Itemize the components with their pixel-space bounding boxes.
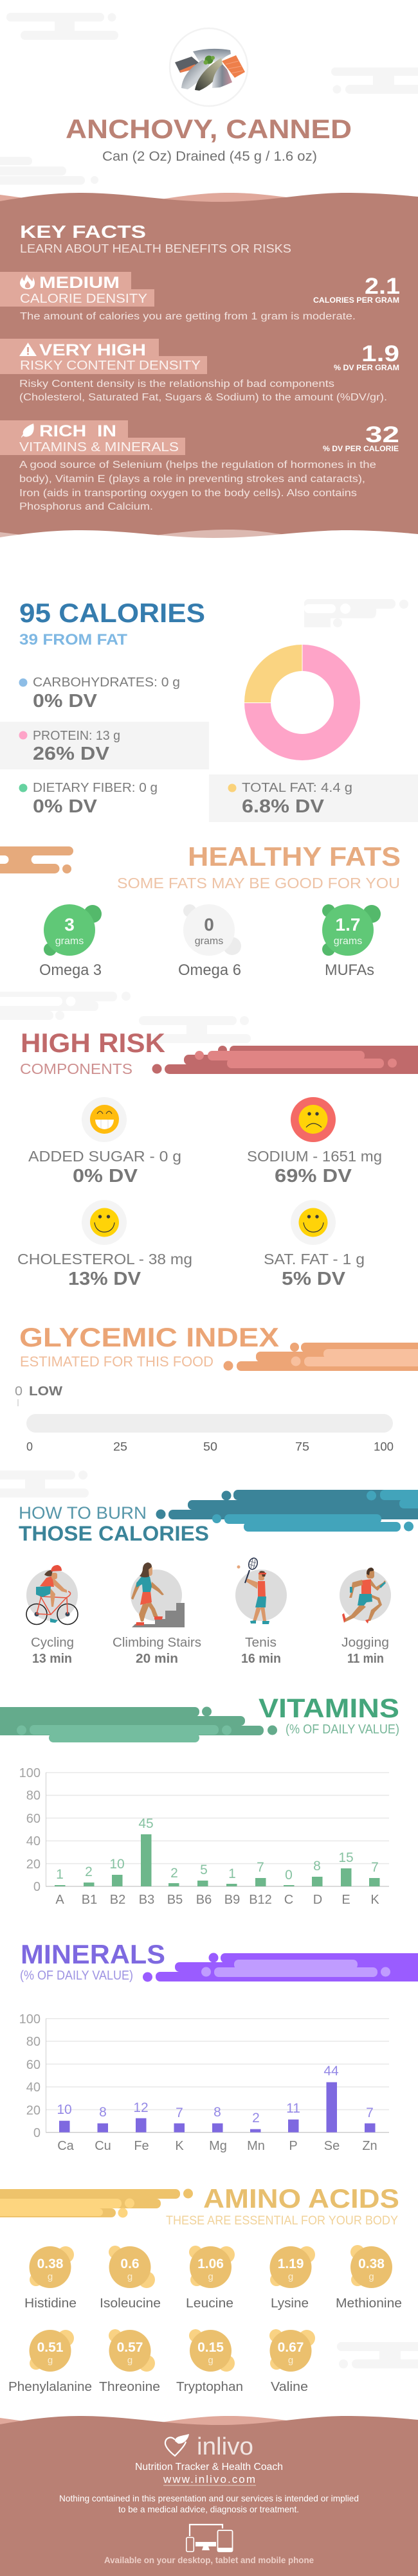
bar chart: minerals: 12 [133, 2100, 149, 2115]
badge: tryptophan: g [208, 2355, 214, 2366]
bar chart: vitamins: B9 [224, 1893, 240, 1907]
bar chart: vitamins: 40 [26, 1834, 41, 1848]
bar chart: minerals: 0 [33, 2126, 41, 2140]
heading: glycemic index: GLYCEMIC INDEX [19, 1322, 279, 1352]
subheading: ESTIMATED FOR THIS FOOD [20, 1354, 214, 1370]
bar chart: minerals: Mn [247, 2139, 265, 2153]
activity: jogging [340, 1568, 391, 1666]
item: total fat [209, 774, 418, 822]
badge: valine: g [288, 2355, 293, 2366]
fact: rich in vitamins and minerals: % DV PER CALORIE [323, 445, 399, 453]
bar chart: minerals: 40 [26, 2080, 41, 2095]
icon: sad face [298, 1105, 328, 1134]
activity: tennis [235, 1557, 287, 1666]
item: carbohydrates: CARBOHYDRATES: 0 g [33, 675, 180, 690]
chart: glycemic scale: 0 [26, 1440, 33, 1453]
marker: value and level [15, 1384, 62, 1406]
fact: rich in vitamins and minerals [0, 420, 399, 512]
item: protein [0, 722, 209, 769]
marker: value and level: 0 [15, 1384, 23, 1399]
heading: vitamins: VITAMINS [259, 1693, 399, 1723]
bar chart: vitamins: C [284, 1893, 293, 1907]
decorative ribbon [0, 1707, 277, 1742]
badge: histidine: Histidine [24, 2296, 77, 2311]
bar chart: vitamins: 5 [200, 1863, 208, 1877]
bar chart: vitamins: E [341, 1893, 350, 1907]
icon: runner [340, 1568, 391, 1623]
badge: histidine: 0.38 [37, 2257, 64, 2271]
item: carbohydrates [19, 675, 180, 711]
activity: climbing stairs: Climbing Stairs [113, 1636, 201, 1650]
badge: threonine: g [127, 2355, 132, 2366]
badge: MUFAs: MUFAs [325, 962, 374, 979]
fact: risky content density: (Cholesterol, Saturated Fat, Sugars & Sodium) to the amount (%DV/gr). [19, 392, 387, 403]
badge: isoleucine: g [127, 2271, 132, 2282]
heading line 1: HOW TO BURN [19, 1503, 147, 1523]
bar chart: minerals: Se [324, 2139, 340, 2153]
icon: leaf [21, 424, 34, 438]
bar chart: vitamins: B5 [167, 1893, 183, 1907]
panel: calories [0, 598, 418, 822]
icon: smiling face [298, 1208, 328, 1237]
badge: lysine: 1.19 [278, 2257, 304, 2271]
badge: omega 3 [39, 904, 102, 979]
panel: high risk [0, 992, 418, 1289]
badge: tryptophan: Tryptophan [176, 2380, 243, 2394]
item: saturated fat: SAT. FAT - 1 g [264, 1251, 365, 1267]
panel: key facts [0, 193, 418, 554]
badge: isoleucine: 0.6 [120, 2257, 140, 2271]
bar chart: vitamins: K [370, 1893, 379, 1907]
badge: omega 3: Omega 3 [39, 962, 102, 979]
item: saturated fat [264, 1200, 365, 1289]
chart: glycemic scale: 100 [374, 1440, 394, 1453]
panel: minerals [19, 1939, 418, 2153]
title: ANCHOVY, CANNED [66, 114, 352, 144]
bar chart: minerals: 8 [214, 2105, 221, 2120]
bar chart: minerals: 2 [252, 2111, 260, 2125]
badge: tryptophan: 0.15 [197, 2340, 224, 2355]
bar chart: vitamins: B6 [196, 1893, 212, 1907]
badge: MUFAs: 1.7 [336, 915, 360, 935]
bar chart: vitamins: 8 [313, 1859, 321, 1874]
activity: jogging: Jogging [341, 1636, 389, 1650]
bar chart: minerals: Zn [362, 2139, 377, 2153]
bar chart: vitamins: B3 [139, 1893, 154, 1907]
fact: calorie density: MEDIUM [39, 274, 120, 292]
bar chart: vitamins: 7 [257, 1860, 264, 1875]
subheading: LEARN ABOUT HEALTH BENEFITS OR RISKS [20, 242, 291, 255]
fact: risky content density: RISKY CONTENT DENSITY [20, 359, 201, 373]
badge: lysine: Lysine [271, 2296, 309, 2311]
fact: calorie density: CALORIE DENSITY [20, 292, 147, 306]
subheading: SOME FATS MAY BE GOOD FOR YOU [117, 875, 400, 891]
badge: leucine [186, 2246, 235, 2311]
badge: lysine: g [288, 2271, 293, 2282]
icon: tennis player [235, 1557, 287, 1624]
badge: omega 3: grams [55, 936, 84, 947]
bar chart: vitamins: 15 [338, 1850, 354, 1865]
badge: isoleucine: Isoleucine [100, 2296, 161, 2311]
tagline: Nutrition Tracker & Health Coach [135, 2462, 283, 2473]
bar chart: vitamins: 7 [371, 1860, 379, 1875]
bar chart: vitamins: B1 [82, 1893, 97, 1907]
badge: methionine [336, 2245, 402, 2311]
icon: devices [186, 2525, 233, 2552]
chart: glycemic scale: 75 [295, 1440, 309, 1453]
bar chart: vitamins: A [55, 1893, 64, 1907]
bar chart: minerals [19, 2012, 389, 2153]
badge: threonine [99, 2329, 160, 2394]
item: dietary fiber [19, 781, 158, 817]
decorative ribbon [0, 846, 73, 873]
bar chart: minerals: 8 [99, 2105, 107, 2120]
bar chart: minerals: 80 [26, 2035, 41, 2049]
panel: glycemic index [15, 1322, 418, 1453]
badge: valine [269, 2329, 315, 2394]
bar chart: minerals: 60 [26, 2058, 41, 2072]
item: total fat: TOTAL FAT: 4.4 g [242, 781, 352, 795]
chart: glycemic scale: 50 [203, 1440, 217, 1453]
badge: omega 6: 0 [204, 915, 214, 935]
bar chart: vitamins: 45 [138, 1816, 154, 1831]
badge: lysine [270, 2246, 315, 2311]
heading: calories: 95 CALORIES [19, 598, 205, 628]
bar chart: minerals: K [175, 2139, 184, 2153]
activity: jogging: 11 min [347, 1652, 384, 1666]
bar chart: vitamins: 2 [85, 1865, 93, 1879]
badge: omega 6: Omega 6 [178, 962, 241, 979]
decorative ribbon [152, 1046, 418, 1074]
serving size subtitle: Can (2 Oz) Drained (45 g / 1.6 oz) [102, 149, 317, 164]
icon: flame [20, 274, 35, 289]
fact: risky content density: Risky Content density is the relationship of bad components [19, 379, 334, 389]
bar chart: vitamins: 1 [228, 1866, 236, 1881]
activity: cycling [26, 1565, 78, 1666]
fact: risky content density: 1.9 [361, 341, 399, 366]
subheading: (% OF DAILY VALUE) [20, 1969, 133, 1983]
bar chart: minerals: 7 [176, 2106, 183, 2120]
disclaimer [59, 2493, 359, 2514]
bar chart: minerals: Ca [57, 2139, 75, 2153]
icon: warning triangle [19, 343, 37, 356]
fact: calorie density: 2.1 [365, 274, 400, 299]
badge: valine: Valine [271, 2380, 308, 2394]
icon: food photo of anchovies [170, 28, 248, 106]
chart: glycemic scale [26, 1414, 394, 1453]
fact: risky content density: VERY HIGH [39, 341, 146, 359]
badge: methionine: 0.38 [358, 2257, 385, 2271]
fact: rich in vitamins and minerals: VITAMINS & MINERALS [19, 440, 179, 454]
badge: valine: 0.67 [278, 2340, 304, 2355]
badge: threonine: Threonine [99, 2380, 160, 2394]
bar chart: minerals: 44 [323, 2064, 339, 2079]
badge: methionine: g [368, 2271, 374, 2282]
bar chart: minerals: 10 [57, 2102, 72, 2117]
marker: value and level: LOW [29, 1384, 62, 1399]
item: protein: 26% DV [33, 744, 110, 764]
panel: vitamins [0, 1693, 399, 1907]
subheading: components: COMPONENTS [20, 1060, 132, 1077]
badge: methionine: Methionine [336, 2296, 402, 2311]
website link: www.inlivo.com [163, 2473, 255, 2485]
subheading: (% OF DAILY VALUE) [286, 1722, 399, 1737]
badge: leucine: Leucine [186, 2296, 233, 2311]
badge: phenylalanine: Phenylalanine [8, 2380, 92, 2394]
item: added sugar: ADDED SUGAR - 0 g [28, 1148, 181, 1165]
fact: calorie density [0, 272, 400, 322]
panel: footer [0, 2416, 418, 2576]
badge: MUFAs: grams [334, 936, 362, 947]
badge: histidine: g [48, 2271, 53, 2282]
decorative ribbon [156, 1490, 418, 1532]
fact: calorie density: The amount of calories you are getting from 1 gram is moderate. [20, 311, 356, 322]
panel: amino acids [0, 2183, 418, 2394]
item: cholesterol [17, 1200, 192, 1289]
bar chart: vitamins: 80 [26, 1789, 41, 1803]
fact: rich in vitamins and minerals: Phosphorus and Calcium. [19, 501, 153, 512]
chart: glycemic scale: 25 [113, 1440, 127, 1453]
bar chart: vitamins: 0 [33, 1880, 41, 1894]
badge: leucine: g [208, 2271, 214, 2282]
badge: omega 6 [178, 904, 241, 979]
bar chart: vitamins: 1 [56, 1867, 64, 1882]
item: added sugar: 0% DV [73, 1166, 138, 1186]
bar chart: vitamins: B2 [110, 1893, 125, 1907]
fact: rich in vitamins and minerals: RICH IN [39, 422, 116, 440]
bar chart: minerals: P [289, 2139, 298, 2153]
fact: rich in vitamins and minerals: 32 [365, 422, 399, 447]
bar chart: minerals: Fe [134, 2139, 149, 2153]
decorative ribbon [143, 1953, 418, 1982]
activity: tennis: 16 min [241, 1652, 281, 1666]
bar chart: vitamins: 10 [109, 1857, 125, 1872]
item: dietary fiber: 0% DV [33, 796, 98, 817]
icon: smiling face [90, 1208, 119, 1237]
item: sodium [247, 1097, 382, 1186]
item: dietary fiber: DIETARY FIBER: 0 g [33, 781, 158, 795]
donut chart [244, 645, 360, 760]
panel: how to burn calories [0, 1471, 418, 1666]
badge: isoleucine [100, 2246, 161, 2311]
badge: threonine: 0.57 [117, 2340, 143, 2355]
fact: calorie density: CALORIES PER GRAM [313, 297, 399, 305]
panel: healthy fats [0, 841, 401, 979]
item: sodium: SODIUM - 1651 mg [247, 1148, 382, 1165]
item: sodium: 69% DV [275, 1166, 352, 1186]
panel: header [0, 13, 418, 185]
item: saturated fat: 5% DV [282, 1269, 346, 1289]
item: carbohydrates: 0% DV [33, 691, 98, 711]
bar chart: minerals: Cu [95, 2139, 111, 2153]
bar chart: minerals: 100 [19, 2012, 41, 2026]
activity: tennis: Tenis [245, 1636, 277, 1650]
heading: key facts: KEY FACTS [20, 222, 146, 242]
heading: healthy fats: HEALTHY FATS [188, 841, 401, 872]
fact: rich in vitamins and minerals: A good source of Selenium (helps the regulation of hormones in the [19, 460, 376, 470]
bar chart: vitamins: 0 [285, 1868, 293, 1883]
heading: minerals: MINERALS [21, 1939, 165, 1969]
item: added sugar [28, 1097, 181, 1186]
availability note: Available on your desktop, tablet and mobile phone [104, 2555, 314, 2565]
subheading: THESE ARE ESSENTIAL FOR YOUR BODY [166, 2214, 398, 2228]
badge: omega 6: grams [195, 936, 223, 947]
disclaimer: to be a medical advice, diagnosis or treatment. [118, 2504, 299, 2514]
bar chart: vitamins: B12 [249, 1893, 272, 1907]
badge: phenylalanine [8, 2330, 92, 2394]
subheading: from fat: 39 FROM FAT [19, 631, 127, 648]
disclaimer: Nothing contained in this presentation and our services is intended or implied [59, 2493, 359, 2503]
bar chart: vitamins: 20 [26, 1857, 41, 1872]
decorative ribbon [224, 1343, 418, 1371]
badge: omega 3: 3 [64, 915, 75, 935]
bar chart: vitamins [19, 1766, 389, 1907]
bar chart: vitamins: D [313, 1893, 322, 1907]
bar chart: vitamins: 60 [26, 1812, 41, 1826]
bar chart: minerals: 11 [286, 2101, 300, 2116]
heading line 2: THOSE CALORIES [19, 1522, 209, 1545]
heading: high risk: HIGH RISK [21, 1028, 165, 1058]
icon: cyclist [26, 1565, 78, 1625]
fact: risky content density: % DV PER GRAM [334, 364, 399, 372]
fact: rich in vitamins and minerals: body), Vitamin E (plays a role in preventing strokes and cataracts), [19, 474, 365, 485]
activity: cycling: 13 min [32, 1652, 72, 1666]
item: protein: PROTEIN: 13 g [33, 729, 120, 743]
item: total fat: 6.8% DV [242, 796, 325, 817]
logo: inlivo: inlivo [197, 2433, 253, 2460]
item: cholesterol: 13% DV [68, 1269, 141, 1289]
bar chart: vitamins: 2 [170, 1866, 178, 1881]
bar chart: vitamins: 100 [19, 1766, 41, 1780]
fact: risky content density [0, 339, 399, 403]
bar chart: minerals: 20 [26, 2104, 41, 2118]
fact: rich in vitamins and minerals: Iron (aids in transporting oxygen to the body cells). Also contains [19, 488, 357, 499]
badge: leucine: 1.06 [197, 2257, 224, 2271]
badge: histidine [24, 2246, 77, 2311]
decorative ribbon [0, 2189, 193, 2217]
activity: climbing stairs: 20 min [136, 1652, 178, 1666]
activity: cycling: Cycling [31, 1636, 74, 1650]
badge: phenylalanine: 0.51 [37, 2340, 64, 2355]
badge: tryptophan [176, 2329, 243, 2394]
badge: MUFAs [322, 904, 381, 979]
icon: woman on stairs [131, 1562, 185, 1627]
bar chart: minerals: Mg [209, 2139, 227, 2153]
heading: amino acids: AMINO ACIDS [203, 2183, 399, 2214]
activity: climbing stairs [113, 1562, 201, 1666]
logo: inlivo [165, 2433, 253, 2460]
item: cholesterol: CHOLESTEROL - 38 mg [17, 1251, 192, 1267]
badge: phenylalanine: g [48, 2355, 53, 2366]
icon: grinning face [90, 1105, 119, 1134]
bar chart: minerals: 7 [366, 2106, 374, 2120]
